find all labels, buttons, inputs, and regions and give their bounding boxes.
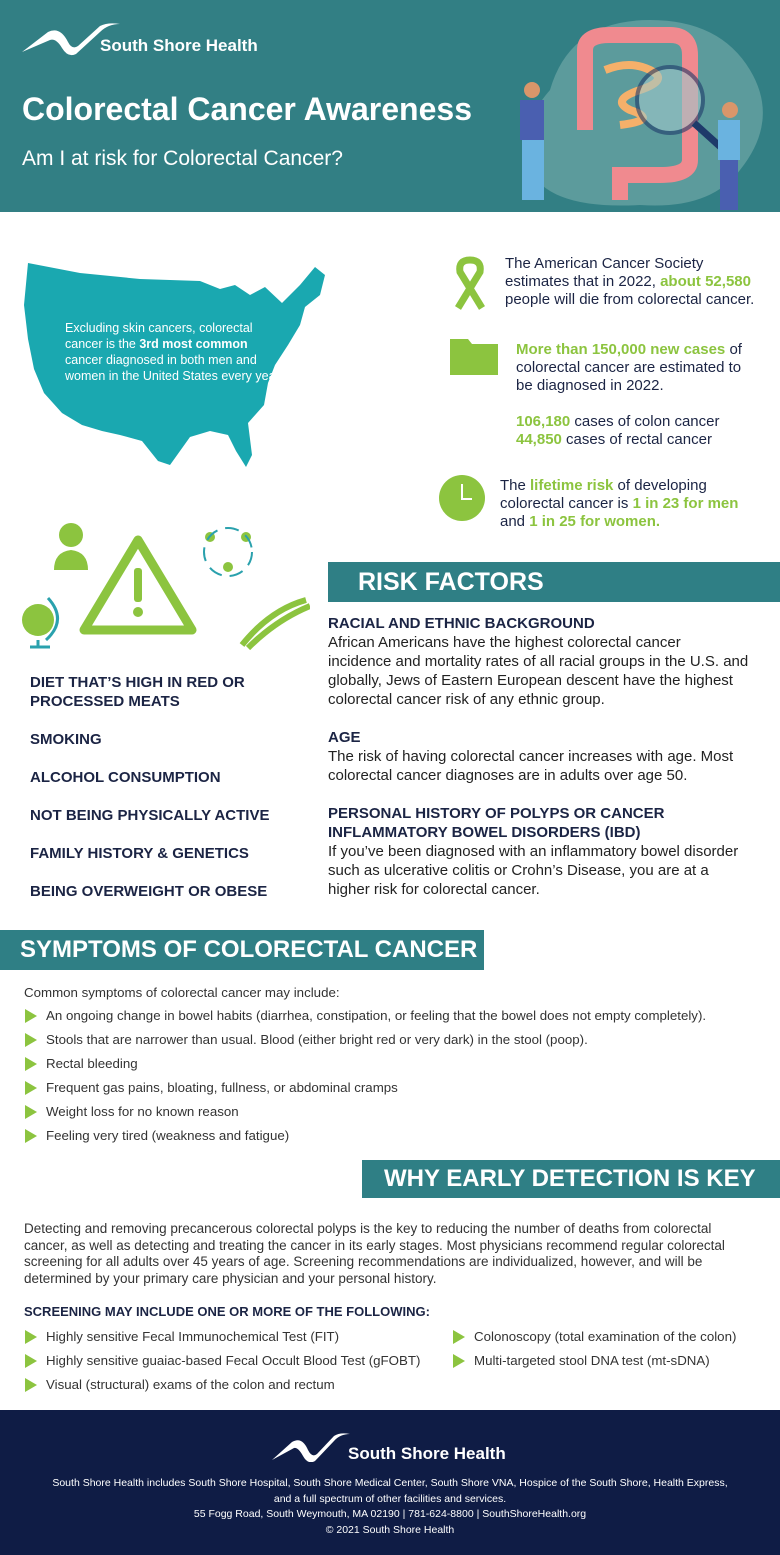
risk factor list: FAMILY HISTORY & GENETICS [30, 845, 249, 862]
header [0, 0, 780, 212]
symptoms list: Common symptoms of colorectal cancer may include: [24, 985, 340, 1000]
screening heading: SCREENING MAY INCLUDE ONE OR MORE OF THE FOLLOWING: [24, 1304, 430, 1319]
stat: deaths [505, 255, 754, 308]
stat: deaths: estimates that in 2022, about 52,580 [505, 273, 751, 290]
stat: new cases: 106,180 cases of colon cancer [516, 413, 719, 430]
footer: South Shore Health includes South Shore Hospital, South Shore Medical Center, South Shore VNA, Hospice of the South Shore, Health Express, [52, 1477, 728, 1489]
icon: folder [450, 339, 498, 375]
stat: lifetime risk [500, 477, 738, 530]
risk factor details [328, 615, 748, 898]
risk factor list: NOT BEING PHYSICALLY ACTIVE [30, 807, 269, 824]
detection paragraph: Detecting and removing precancerous colorectal polyps is the key to reducing the number of deaths from colorectal [24, 1221, 711, 1236]
heading: risk factors [328, 562, 780, 602]
symptoms list: Rectal bleeding [46, 1056, 138, 1071]
illustration: doctors and colon [520, 20, 763, 210]
risk factor details: PERSONAL HISTORY OF POLYPS OR CANCER [328, 805, 664, 822]
stat: deaths: people will die from colorectal cancer. [505, 291, 754, 308]
detection paragraph [24, 1221, 725, 1286]
stat: new cases [516, 341, 742, 448]
risk factor list [30, 674, 269, 900]
footer [0, 1410, 780, 1555]
heading: early detection: WHY EARLY DETECTION IS KEY [384, 1165, 756, 1192]
screening list left: Highly sensitive Fecal Immunochemical Test (FIT) [46, 1329, 339, 1344]
detection paragraph: cancer, as well as detecting and treating the cancer in its early stages. Most physicians recommend regular colorectal [24, 1238, 725, 1252]
logo: South Shore Health [100, 36, 258, 55]
screening list right: Multi-targeted stool DNA test (mt-sDNA) [474, 1353, 710, 1368]
detection paragraph: determined by your primary care physician and your personal history. [24, 1270, 436, 1286]
risk icons [22, 523, 310, 650]
symptoms list [24, 985, 706, 1143]
risk factor list: SMOKING [30, 731, 102, 748]
footer: and a full spectrum of other facilities and services. [274, 1492, 506, 1504]
risk factor details: such as ulcerative colitis or Crohn’s Disease, you are at a [328, 862, 709, 879]
risk factor details: INFLAMMATORY BOWEL DISORDERS (IBD) [328, 824, 640, 841]
footer: 55 Fogg Road, South Weymouth, MA 02190 | 781-624-8800 | SouthShoreHealth.org [194, 1508, 586, 1520]
risk factor details: colorectal cancer diagnoses are in adults over age 50. [328, 767, 687, 784]
symptoms list: Feeling very tired (weakness and fatigue) [46, 1128, 289, 1143]
symptoms list: Weight loss for no known reason [46, 1104, 239, 1119]
risk factor details: AGE [328, 729, 361, 746]
stat: new cases: colorectal cancer are estimated to [516, 359, 741, 376]
stat: new cases: 44,850 cases of rectal cancer [516, 431, 712, 448]
stat: lifetime risk: colorectal cancer is 1 in 23 for men [500, 495, 738, 512]
risk factor details: globally, Jews of Eastern European descent have the highest [328, 672, 733, 689]
risk factor list: DIET THAT’S HIGH IN RED OR PROCESSED MEATS [30, 674, 245, 710]
risk factor details: The risk of having colorectal cancer increases with age. Most [328, 748, 733, 765]
title: Colorectal Cancer Awareness [22, 91, 472, 127]
US map with stat: cancer is the 3rd most common [65, 337, 248, 351]
US map with stat: cancer diagnosed in both men and [65, 353, 257, 367]
risk factor details: RACIAL AND ETHNIC BACKGROUND [328, 615, 595, 632]
heading: risk factors: RISK FACTORS [358, 568, 544, 596]
US map with stat [24, 263, 325, 467]
screening list right: Colonoscopy (total examination of the colon) [474, 1329, 736, 1344]
icon: ribbon [455, 256, 485, 310]
stat: new cases: More than 150,000 new cases of [516, 341, 742, 358]
footer logo [272, 1433, 506, 1463]
US map with stat: women in the United States every year. [65, 369, 282, 383]
screening list right [453, 1329, 736, 1368]
risk factor details: If you’ve been diagnosed with an inflammatory bowel disorder [328, 843, 738, 860]
screening list left: Highly sensitive guaiac-based Fecal Occult Blood Test (gFOBT) [46, 1353, 420, 1368]
heading: symptoms [0, 930, 484, 970]
icon: clock [439, 475, 485, 521]
risk factor list: ALCOHOL CONSUMPTION [30, 769, 221, 786]
risk factor details: higher risk for colorectal cancer. [328, 881, 540, 898]
logo [22, 23, 258, 56]
stat: lifetime risk: The lifetime risk of developing [500, 477, 707, 494]
risk factor details: African Americans have the highest colorectal cancer [328, 634, 681, 651]
screening list left: Visual (structural) exams of the colon and rectum [46, 1377, 335, 1392]
stat: deaths: The American Cancer Society [505, 255, 703, 272]
footer: © 2021 South Shore Health [326, 1524, 454, 1536]
risk factor details: incidence and mortality rates of all racial groups in the U.S. and [328, 653, 748, 670]
heading: symptoms: SYMPTOMS OF COLORECTAL CANCER [20, 936, 477, 963]
symptoms list: An ongoing change in bowel habits (diarrhea, constipation, or feeling that the bowel does not empty completely). [46, 1008, 706, 1023]
heading: early detection [362, 1160, 780, 1198]
risk factor list: BEING OVERWEIGHT OR OBESE [30, 883, 267, 900]
stat: new cases: be diagnosed in 2022. [516, 377, 664, 394]
risk factor details: colorectal cancer risk of any ethnic group. [328, 691, 605, 708]
stat: lifetime risk: and 1 in 25 for women. [500, 513, 660, 530]
symptoms list: Frequent gas pains, bloating, fullness, or abdominal cramps [46, 1080, 398, 1095]
US map with stat: Excluding skin cancers, colorectal [65, 321, 253, 335]
screening list left [25, 1329, 420, 1392]
subtitle: Am I at risk for Colorectal Cancer? [22, 147, 343, 170]
symptoms list: Stools that are narrower than usual. Blood (either bright red or very dark) in the stool (poop). [46, 1032, 588, 1047]
footer logo: South Shore Health [348, 1444, 506, 1463]
detection paragraph: screening for all adults over 45 years of age. Screening recommendations are individualized, however, and will be [24, 1254, 702, 1269]
